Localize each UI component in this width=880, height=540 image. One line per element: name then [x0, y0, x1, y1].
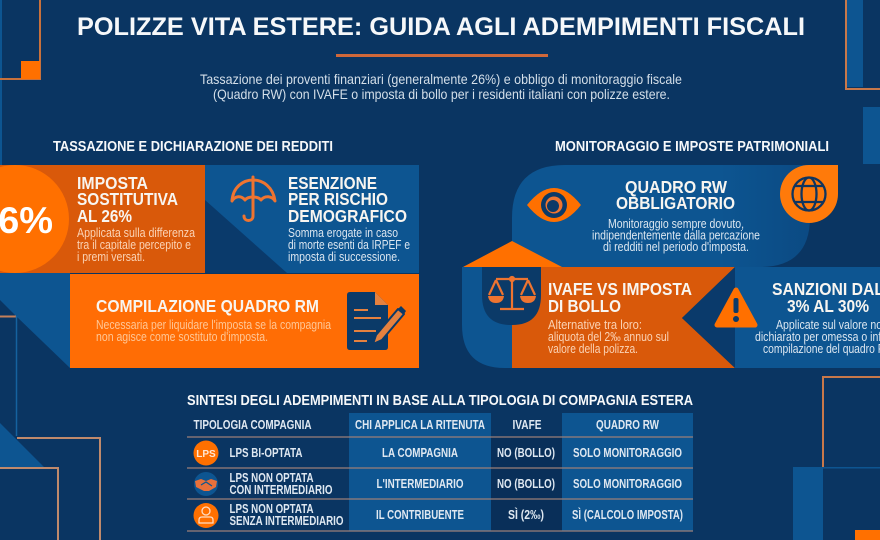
panel: imposta sostitutiva: AL 26%	[77, 206, 132, 226]
panel: IVAFE vs imposta di bollo: Alternative tra loro:	[548, 318, 642, 332]
row: LPS non optata senza intermediario: SÌ (CALCOLO IMPOSTA)	[572, 507, 683, 522]
row: LPS non optata con intermediario: SOLO MONITORAGGIO	[573, 477, 682, 491]
panel: compilazione quadro RM: Necessaria per liquidare l'imposta se la compagnia	[96, 318, 331, 332]
row: LPS non optata con intermediario: NO (BOLLO)	[497, 477, 555, 491]
icon: eye	[527, 188, 581, 222]
panel: esenzione rischio demografico: PER RISCHIO	[288, 189, 388, 209]
row: LPS non optata senza intermediario: LPS NON OPTATA	[230, 502, 314, 516]
row: LPS non optata senza intermediario: IL CONTRIBUENTE	[376, 508, 464, 522]
panel: quadro RW obbligatorio	[512, 165, 838, 267]
row: LPS non optata con intermediario: LPS NON OPTATA	[230, 471, 314, 485]
heading: monitoraggio: MONITORAGGIO E IMPOSTE PATRIMONIALI	[555, 139, 829, 155]
panel: esenzione rischio demografico: di morte esenti da IRPEF e	[288, 238, 410, 252]
row: LPS bi-optata: LPS	[196, 449, 216, 460]
panel: quadro RW obbligatorio: QUADRO RW	[625, 177, 727, 197]
panel: imposta sostitutiva	[0, 165, 205, 273]
subtitle: Tassazione dei proventi finanziari (generalmente 26%) e obbligo di monitoraggio fiscale	[200, 71, 682, 87]
table header: CHI APPLICA LA RITENUTA	[355, 418, 485, 432]
panel: compilazione quadro RM: COMPILAZIONE QUADRO RM	[96, 296, 319, 316]
panel: compilazione quadro RM	[70, 274, 419, 368]
panel: imposta sostitutiva: i premi versati.	[77, 250, 145, 264]
icon: scales shield	[482, 267, 541, 325]
row: LPS bi-optata: NO (BOLLO)	[497, 446, 555, 460]
icon: umbrella	[232, 177, 275, 220]
panel: imposta sostitutiva: Applicata sulla differenza	[77, 226, 195, 240]
panel: esenzione rischio demografico	[205, 165, 419, 273]
panel: IVAFE vs imposta di bollo: DI BOLLO	[548, 296, 621, 316]
row: LPS bi-optata: SOLO MONITORAGGIO	[573, 446, 682, 460]
row: LPS bi-optata	[194, 440, 682, 466]
panel: esenzione rischio demografico: imposta di successione.	[288, 250, 400, 264]
panel: sanzioni: 3% AL 30%	[787, 296, 869, 316]
table header	[194, 418, 659, 432]
subtitle	[200, 71, 682, 102]
subtitle: (Quadro RW) con IVAFE o imposta di bollo per i residenti italiani con polizze estere.	[213, 86, 670, 102]
table: sintesi adempimenti	[187, 413, 693, 531]
row: LPS non optata senza intermediario: SENZA INTERMEDIARIO	[230, 514, 344, 528]
row: LPS non optata senza intermediario: SÌ (2‰)	[508, 507, 544, 522]
icon: document and pen	[347, 292, 406, 350]
panel: imposta sostitutiva: IMPOSTA	[77, 173, 148, 193]
panel: esenzione rischio demografico: DEMOGRAFICO	[288, 206, 407, 226]
panel: IVAFE vs imposta di bollo: valore della polizza.	[548, 342, 638, 356]
panel: quadro RW obbligatorio: di redditi nel periodo d'imposta.	[603, 240, 749, 254]
title underline	[336, 54, 548, 57]
row: LPS non optata con intermediario: L'INTERMEDIARIO	[376, 477, 464, 491]
icon: warning triangle	[717, 290, 755, 325]
panel: esenzione rischio demografico: Somma erogate in caso	[288, 226, 398, 240]
panel: imposta sostitutiva: tra il capitale percepito e	[77, 238, 191, 252]
table header: QUADRO RW	[596, 418, 659, 432]
panel: sanzioni	[682, 267, 880, 368]
row: LPS non optata con intermediario	[194, 471, 682, 497]
panel: IVAFE vs imposta di bollo: IVAFE VS IMPOSTA	[548, 279, 692, 299]
table header: TIPOLOGIA COMPAGNIA	[194, 418, 312, 432]
row: LPS bi-optata: LA COMPAGNIA	[382, 446, 458, 460]
row: LPS bi-optata: LPS BI-OPTATA	[230, 446, 302, 460]
panel: imposta sostitutiva: SOSTITUTIVA	[77, 189, 178, 209]
panel: quadro RW obbligatorio: indipendentemente dalla percazione	[592, 228, 760, 242]
row: LPS non optata con intermediario: CON INTERMEDIARIO	[230, 483, 333, 497]
panel: esenzione rischio demografico: ESENZIONE	[288, 173, 377, 193]
heading: tassazione: TASSAZIONE E DICHIARAZIONE DEI REDDITI	[53, 139, 333, 155]
row: LPS non optata senza intermediario	[194, 502, 683, 528]
panel: IVAFE vs imposta di bollo: aliquota del 2‰ annuo sul	[548, 330, 669, 344]
icon: globe badge	[780, 165, 838, 223]
title: POLIZZE VITA ESTERE: GUIDA AGLI ADEMPIMENTI FISCALI	[77, 13, 805, 41]
table header: IVAFE	[512, 418, 542, 432]
panel: compilazione quadro RM: non agisce come sostituto d'imposta.	[96, 330, 268, 344]
panel: IVAFE vs imposta di bollo	[462, 241, 735, 368]
heading: sintesi: SINTESI DEGLI ADEMPIMENTI IN BASE ALLA TIPOLOGIA DI COMPAGNIA ESTERA	[187, 392, 693, 409]
panel: quadro RW obbligatorio: Monitoraggio sempre dovuto,	[608, 217, 744, 231]
icon: 26% circle	[0, 165, 69, 273]
panel: quadro RW obbligatorio: OBBLIGATORIO	[616, 193, 735, 213]
